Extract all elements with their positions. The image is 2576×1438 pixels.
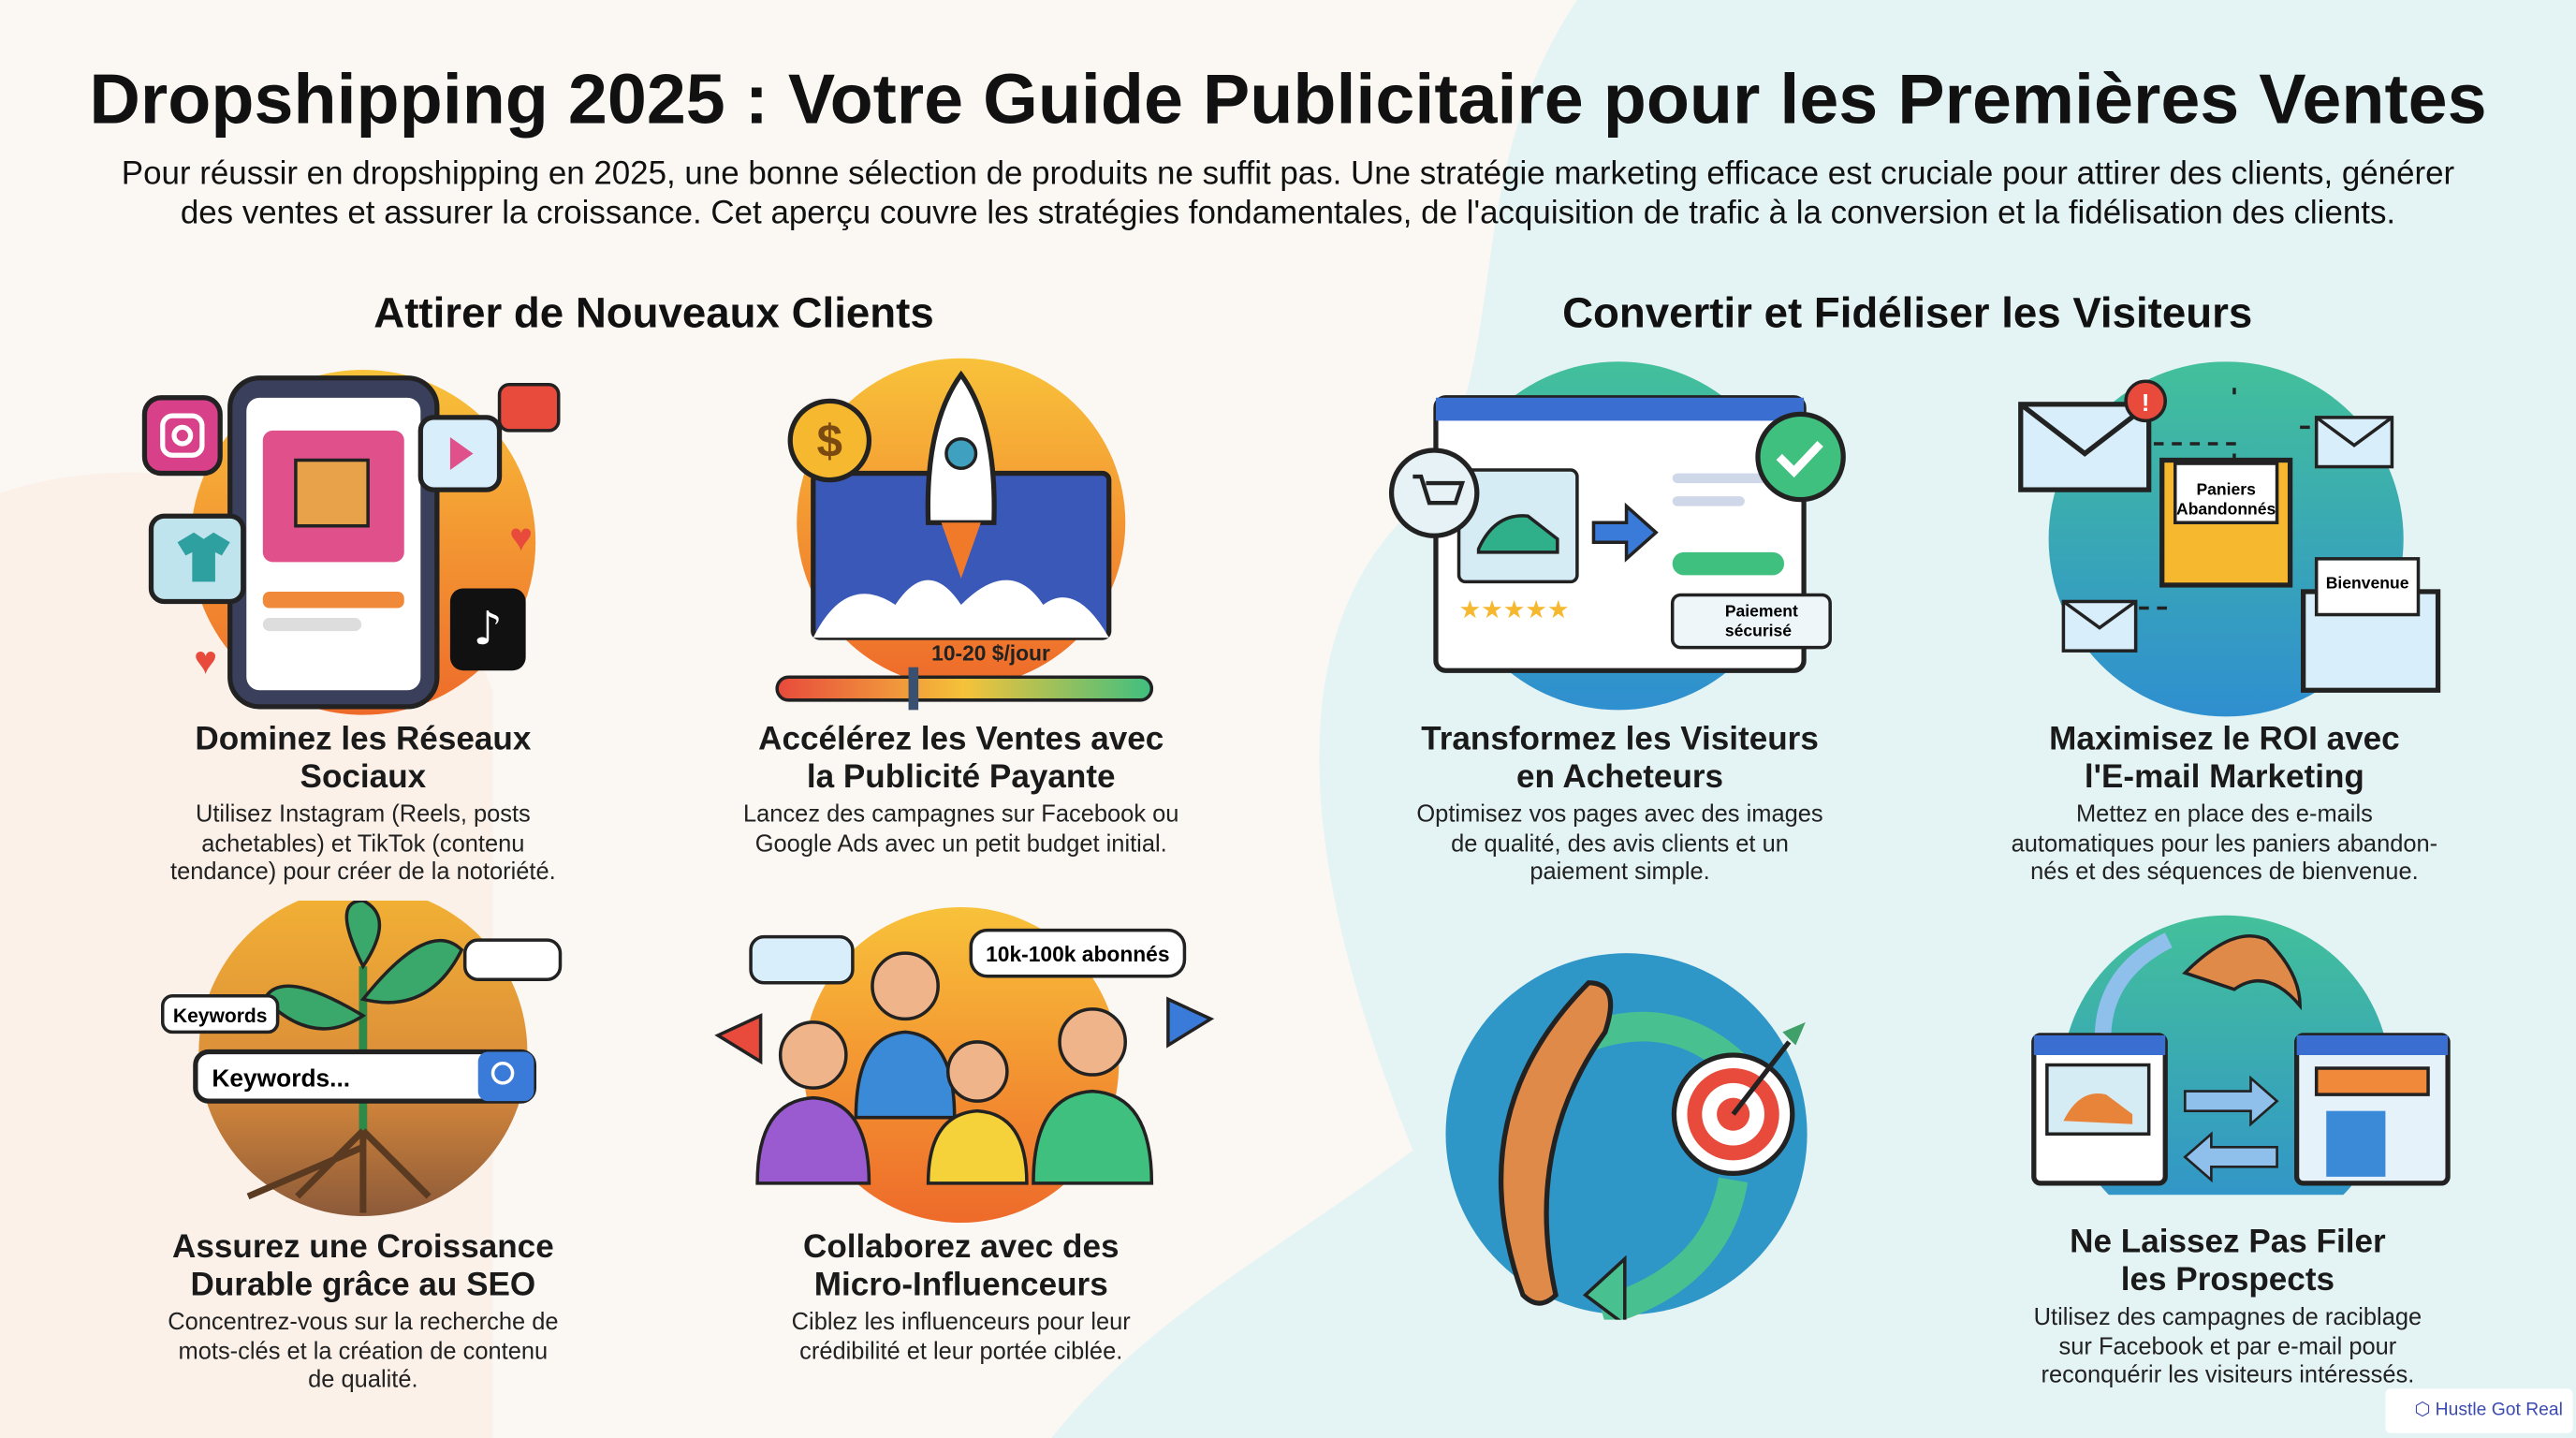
title: Dropshipping 2025 : Votre Guide Publicitaire pour les Premières Ventes (89, 61, 2487, 139)
card text: convert: Optimisez vos pages avec des images (1416, 802, 1823, 829)
card text: influencers: Collaborez avec des (803, 1229, 1119, 1266)
icon: social media phone: ♥ (194, 638, 217, 682)
card text: convert: paiement simple. (1530, 859, 1710, 886)
icon: email marketing (2018, 361, 2441, 717)
icon: influencers: 10k-100k abonnés (986, 942, 1170, 966)
card text: SEO: mots-clés et la création de contenu (179, 1339, 548, 1365)
subtitle: des ventes et assurer la croissance. Cet aperçu couvre les stratégies fondamentales, de l'acquisition de trafic à la conversion et la fidélisation des clients. (181, 196, 2395, 232)
card text: retargeting (2034, 1225, 2422, 1388)
icon: social media phone: ♥ (509, 515, 533, 559)
card text: retargeting: les Prospects (2121, 1262, 2334, 1299)
icon: rocket paid ads: 10-20 $/jour (931, 641, 1050, 666)
card text: email: automatiques pour les paniers abandon- (2012, 830, 2437, 857)
card text: convert: de qualité, des avis clients et un (1451, 830, 1789, 857)
card text: paid ads: Google Ads avec un petit budget initial. (755, 830, 1167, 857)
icon: product page conversion: sécurisé (1725, 621, 1792, 639)
icon: rocket paid ads (775, 358, 1153, 710)
card text: paid ads: la Publicité Payante (807, 759, 1116, 796)
icon: social media phone: ♪ (474, 601, 503, 655)
icon: influencers (714, 907, 1215, 1223)
icon: product page conversion: ★★★★★ (1459, 595, 1569, 624)
card text: influencers (792, 1229, 1131, 1365)
card text: paid ads (743, 722, 1178, 857)
card text: social (170, 722, 556, 886)
card text: SEO: Durable grâce au SEO (191, 1267, 535, 1303)
card text: email (2012, 722, 2437, 886)
card text: SEO (168, 1229, 559, 1394)
card text: social: Dominez les Réseaux (195, 722, 531, 757)
card text: paid ads: Accélérez les Ventes avec (758, 722, 1164, 757)
card text: email: Mettez en place des e-mails (2076, 802, 2373, 829)
icon: email marketing: ! (2142, 389, 2150, 417)
card text: social: achetables) et TikTok (contenu (201, 830, 524, 857)
card text: retargeting: Utilisez des campagnes de raciblage (2034, 1305, 2422, 1331)
card text: social: Sociaux (300, 759, 426, 796)
icon: product page conversion: Paiement (1725, 601, 1798, 620)
card text: SEO: Assurez une Croissance (172, 1229, 554, 1266)
icon: product page conversion (1389, 361, 1846, 710)
card text: email: l'E-mail Marketing (2085, 759, 2364, 796)
icon: social media phone (142, 370, 560, 715)
icon: SEO plant (161, 901, 562, 1216)
icon: rocket paid ads: $ (817, 417, 842, 467)
card text: influencers: Micro-Influenceurs (814, 1267, 1108, 1303)
card text: retargeting: sur Facebook et par e-mail pour (2059, 1334, 2396, 1360)
card text: SEO: de qualité. (308, 1368, 418, 1394)
card text: convert: en Acheteurs (1516, 759, 1723, 796)
subtitle (122, 156, 2454, 232)
icon: SEO plant: Keywords... (212, 1064, 350, 1092)
subtitle: Pour réussir en dropshipping en 2025, une bonne sélection de produits ne suffit pas. Une stratégie marketing efficace est cruciale pour attirer des clients, générer (122, 156, 2454, 192)
card text: retargeting: reconquérir les visiteurs intéressés. (2041, 1362, 2414, 1388)
card text: convert (1416, 722, 1823, 886)
icon: boomerang target (1445, 953, 1808, 1320)
card text: paid ads: Lancez des campagnes sur Facebook ou (743, 802, 1178, 829)
icon: email marketing: Bienvenue (2326, 573, 2409, 592)
card text: social: Utilisez Instagram (Reels, posts (196, 802, 531, 829)
card text: influencers: crédibilité et leur portée ciblée. (799, 1339, 1122, 1365)
section heading right: Convertir et Fidéliser les Visiteurs (1562, 287, 2252, 337)
card text: influencers: Ciblez les influenceurs pour leur (792, 1310, 1131, 1336)
watermark: ⬡ Hustle Got Real (2414, 1401, 2563, 1420)
watermark (2385, 1388, 2572, 1433)
card text: retargeting: Ne Laissez Pas Filer (2070, 1225, 2386, 1260)
icon: retargeting (2031, 916, 2451, 1195)
icon: email marketing: Abandonnés (2176, 499, 2276, 518)
icon: SEO plant: Keywords (173, 1005, 267, 1027)
section heading left: Attirer de Nouveaux Clients (373, 287, 934, 337)
icon: email marketing: Paniers (2196, 479, 2256, 498)
card text: convert: Transformez les Visiteurs (1421, 722, 1819, 757)
card text: email: nés et des séquences de bienvenue. (2030, 859, 2419, 886)
card text: social: tendance) pour créer de la notoriété. (170, 859, 556, 886)
card text: SEO: Concentrez-vous sur la recherche de (168, 1310, 559, 1336)
card text: email: Maximisez le ROI avec (2049, 722, 2400, 757)
